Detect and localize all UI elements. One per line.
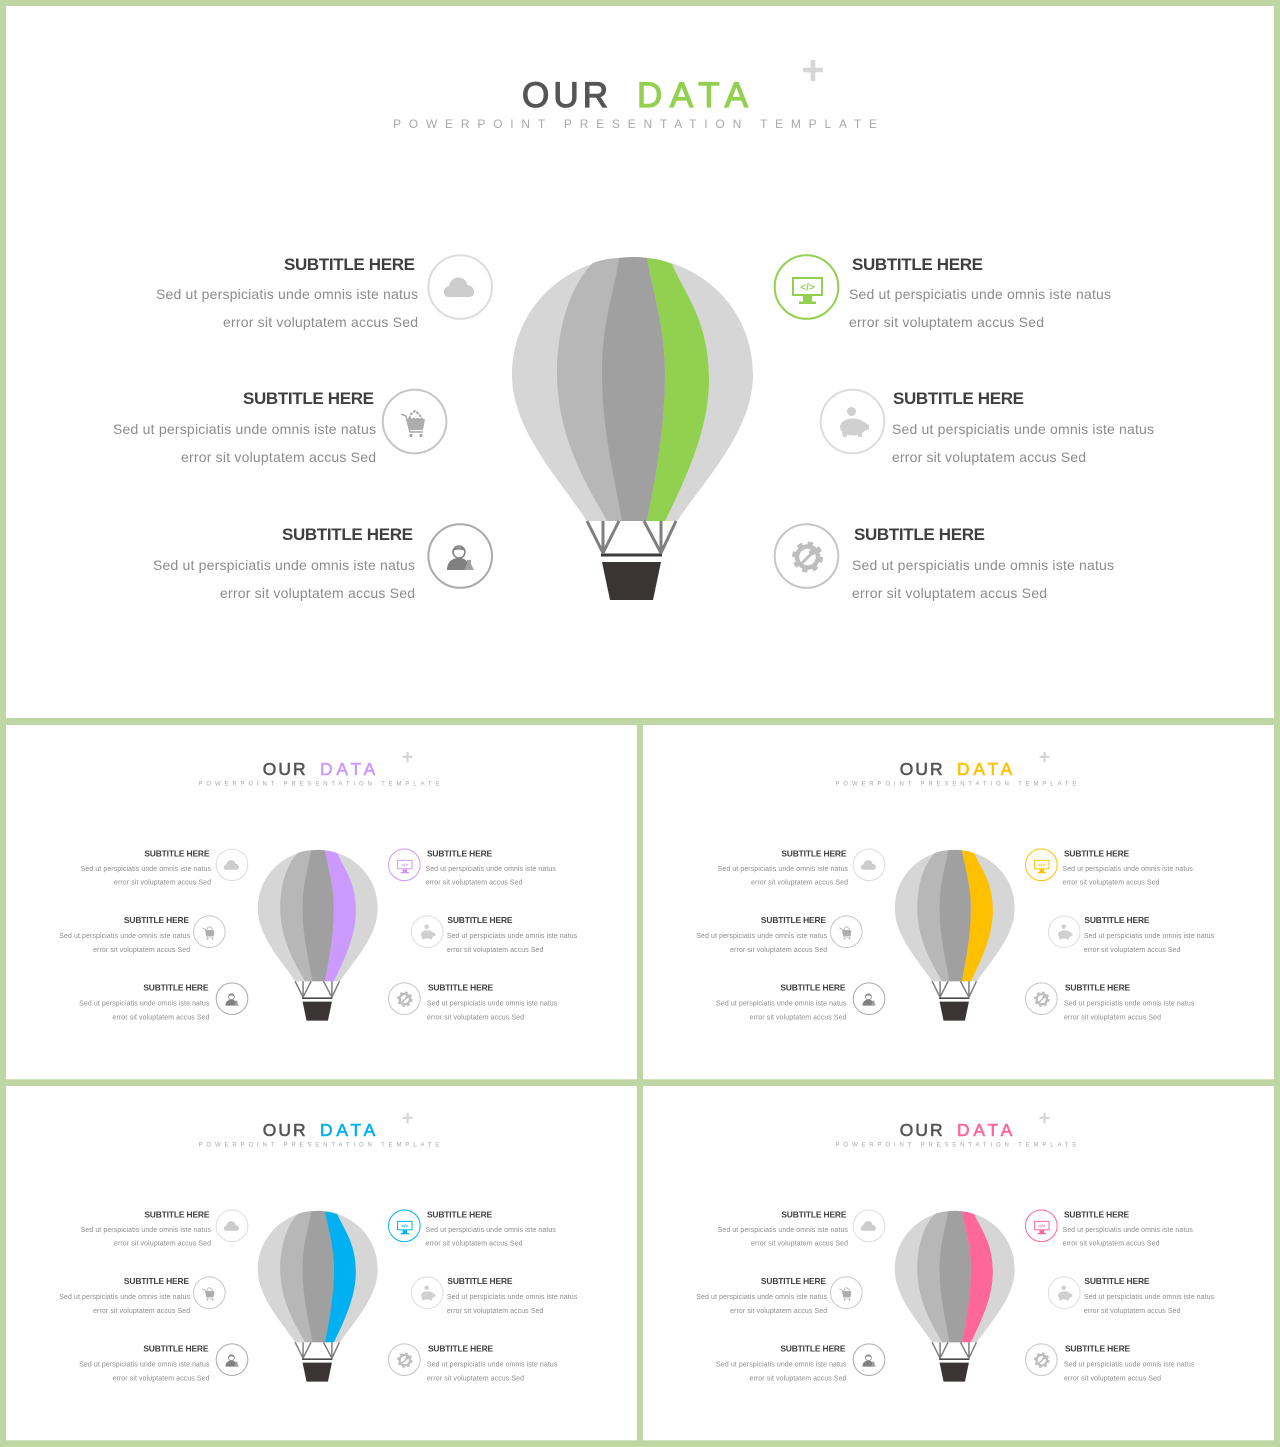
item: left middle bbox=[696, 1276, 862, 1315]
balloon bbox=[512, 257, 753, 600]
item: right top bbox=[1026, 848, 1193, 887]
item: left middle: SUBTITLE HERE bbox=[761, 1276, 826, 1286]
item: right top bbox=[389, 1209, 556, 1248]
item: left top: error sit voluptatem accus Sed bbox=[223, 314, 418, 330]
icon: plus bbox=[403, 1113, 413, 1123]
panel: slide, purple bbox=[6, 725, 637, 1079]
item: left middle: Sed ut perspiciatis unde omnis iste natus bbox=[696, 1294, 828, 1301]
item: left bottom bbox=[716, 1344, 885, 1383]
item: left bottom: SUBTITLE HERE bbox=[143, 983, 209, 993]
item: left top: SUBTITLE HERE bbox=[144, 1209, 210, 1219]
item: left top bbox=[156, 255, 492, 330]
item: right middle: error sit voluptatem accus Sed bbox=[447, 1308, 544, 1315]
item: left top bbox=[718, 848, 885, 887]
item: right bottom: SUBTITLE HERE bbox=[854, 525, 985, 544]
item: left bottom: error sit voluptatem accus Sed bbox=[220, 585, 415, 601]
item: left top: error sit voluptatem accus Sed bbox=[751, 1241, 848, 1248]
item: right top: error sit voluptatem accus Sed bbox=[425, 1241, 523, 1248]
item: right top: error sit voluptatem accus Sed bbox=[425, 880, 523, 887]
item: left bottom: SUBTITLE HERE bbox=[780, 1344, 846, 1354]
title: DATA bbox=[320, 759, 376, 779]
subtitle: POWERPOINT PRESENTATION TEMPLATE bbox=[393, 117, 877, 131]
item: left top: SUBTITLE HERE bbox=[284, 255, 415, 274]
item: right top: SUBTITLE HERE bbox=[1064, 848, 1130, 858]
icon: plus bbox=[1040, 752, 1050, 762]
item: left middle bbox=[59, 915, 225, 954]
item: left top: Sed ut perspiciatis unde omnis iste natus bbox=[81, 1227, 212, 1234]
item: left bottom: SUBTITLE HERE bbox=[143, 1344, 209, 1354]
panel: slide, yellow bbox=[643, 725, 1274, 1079]
subtitle: POWERPOINT PRESENTATION TEMPLATE bbox=[836, 782, 1076, 788]
item: left middle bbox=[113, 389, 446, 465]
subtitle: POWERPOINT PRESENTATION TEMPLATE bbox=[199, 782, 439, 788]
item: right bottom: SUBTITLE HERE bbox=[428, 1344, 494, 1354]
item: right middle bbox=[1048, 1276, 1215, 1315]
item: left middle: Sed ut perspiciatis unde omnis iste natus bbox=[59, 1294, 191, 1301]
item: right top: Sed ut perspiciatis unde omnis iste natus bbox=[849, 286, 1111, 302]
item: right bottom: error sit voluptatem accus Sed bbox=[852, 585, 1047, 601]
item: right bottom: Sed ut perspiciatis unde omnis iste natus bbox=[852, 557, 1114, 573]
item: left bottom: error sit voluptatem accus Sed bbox=[749, 1376, 847, 1383]
item: right bottom bbox=[389, 1344, 558, 1383]
item: left top bbox=[718, 1209, 885, 1248]
item: left bottom: Sed ut perspiciatis unde omnis iste natus bbox=[716, 1362, 847, 1369]
item: right middle: error sit voluptatem accus Sed bbox=[1084, 1308, 1181, 1315]
item: right top bbox=[389, 848, 556, 887]
item: left middle: SUBTITLE HERE bbox=[124, 915, 189, 925]
title: OUR bbox=[900, 759, 943, 779]
item: right middle: Sed ut perspiciatis unde omnis iste natus bbox=[1084, 933, 1215, 940]
item: right middle: SUBTITLE HERE bbox=[447, 915, 513, 925]
subtitle: POWERPOINT PRESENTATION TEMPLATE bbox=[836, 1143, 1076, 1149]
item: left middle: error sit voluptatem accus Sed bbox=[730, 1308, 827, 1315]
item: right bottom: Sed ut perspiciatis unde omnis iste natus bbox=[427, 1001, 558, 1008]
item: right bottom: Sed ut perspiciatis unde omnis iste natus bbox=[1064, 1001, 1195, 1008]
item: left bottom: Sed ut perspiciatis unde omnis iste natus bbox=[79, 1362, 210, 1369]
item: right top: SUBTITLE HERE bbox=[427, 848, 493, 858]
item: right middle: error sit voluptatem accus Sed bbox=[892, 449, 1086, 465]
panel: slide, pink bbox=[643, 1086, 1274, 1440]
title: DATA bbox=[957, 759, 1013, 779]
balloon bbox=[895, 850, 1015, 1021]
item: right top: </> bbox=[1038, 863, 1046, 869]
item: left top: Sed ut perspiciatis unde omnis iste natus bbox=[718, 1227, 849, 1234]
item: left bottom bbox=[79, 983, 248, 1022]
item: right bottom: error sit voluptatem accus Sed bbox=[427, 1376, 524, 1383]
item: left middle: SUBTITLE HERE bbox=[124, 1276, 189, 1286]
item: left bottom: error sit voluptatem accus Sed bbox=[112, 1015, 210, 1022]
title: DATA bbox=[637, 76, 749, 115]
item: right top: </> bbox=[1038, 1224, 1046, 1230]
item: left bottom bbox=[153, 524, 492, 601]
title: DATA bbox=[957, 1120, 1013, 1140]
item: left bottom: Sed ut perspiciatis unde omnis iste natus bbox=[79, 1001, 210, 1008]
item: right top: Sed ut perspiciatis unde omnis iste natus bbox=[1062, 1227, 1193, 1234]
panel: main slide, green bbox=[6, 6, 1274, 718]
item: right top: error sit voluptatem accus Sed bbox=[1062, 880, 1160, 887]
item: right top: Sed ut perspiciatis unde omnis iste natus bbox=[425, 1227, 556, 1234]
item: right top: error sit voluptatem accus Sed bbox=[849, 314, 1044, 330]
item: right middle: error sit voluptatem accus Sed bbox=[447, 947, 544, 954]
item: left top: error sit voluptatem accus Sed bbox=[114, 880, 211, 887]
title bbox=[263, 759, 376, 779]
item: left bottom: SUBTITLE HERE bbox=[780, 983, 846, 993]
item: left middle: error sit voluptatem accus Sed bbox=[93, 1308, 190, 1315]
item: right middle bbox=[1048, 915, 1215, 954]
item: right middle: Sed ut perspiciatis unde omnis iste natus bbox=[1084, 1294, 1215, 1301]
item: right top: SUBTITLE HERE bbox=[1064, 1209, 1130, 1219]
item: right bottom bbox=[1026, 1344, 1195, 1383]
item: right bottom: error sit voluptatem accus Sed bbox=[427, 1015, 524, 1022]
item: right middle: Sed ut perspiciatis unde omnis iste natus bbox=[892, 421, 1154, 437]
item: left bottom bbox=[716, 983, 885, 1022]
item: right middle bbox=[411, 1276, 578, 1315]
title: OUR bbox=[522, 76, 608, 115]
item: left top: error sit voluptatem accus Sed bbox=[114, 1241, 211, 1248]
item: left bottom: error sit voluptatem accus Sed bbox=[112, 1376, 210, 1383]
item: right top: </> bbox=[800, 282, 815, 294]
title bbox=[263, 1120, 376, 1140]
item: left bottom: SUBTITLE HERE bbox=[282, 525, 413, 544]
item: left top: Sed ut perspiciatis unde omnis iste natus bbox=[718, 866, 849, 873]
item: left middle: error sit voluptatem accus Sed bbox=[181, 449, 376, 465]
item: left bottom: Sed ut perspiciatis unde omnis iste natus bbox=[716, 1001, 847, 1008]
balloon bbox=[895, 1211, 1015, 1382]
item: left bottom bbox=[79, 1344, 248, 1383]
item: left top bbox=[81, 1209, 248, 1248]
item: left middle: SUBTITLE HERE bbox=[761, 915, 826, 925]
item: left middle: error sit voluptatem accus Sed bbox=[93, 947, 190, 954]
item: right top: error sit voluptatem accus Sed bbox=[1062, 1241, 1160, 1248]
item: right top bbox=[1026, 1209, 1193, 1248]
item: right bottom: SUBTITLE HERE bbox=[428, 983, 494, 993]
item: left middle: Sed ut perspiciatis unde omnis iste natus bbox=[59, 933, 191, 940]
title bbox=[900, 759, 1013, 779]
item: right middle bbox=[821, 389, 1154, 465]
item: right top: SUBTITLE HERE bbox=[852, 255, 983, 274]
item: right top: SUBTITLE HERE bbox=[427, 1209, 493, 1219]
title: OUR bbox=[263, 759, 306, 779]
item: left top: SUBTITLE HERE bbox=[781, 1209, 847, 1219]
title: OUR bbox=[900, 1120, 943, 1140]
item: left middle: SUBTITLE HERE bbox=[243, 389, 374, 408]
item: right top: Sed ut perspiciatis unde omnis iste natus bbox=[1062, 866, 1193, 873]
item: left middle: error sit voluptatem accus Sed bbox=[730, 947, 827, 954]
item: right middle: SUBTITLE HERE bbox=[1084, 915, 1150, 925]
item: right middle: SUBTITLE HERE bbox=[893, 389, 1024, 408]
title: OUR bbox=[263, 1120, 306, 1140]
icon: plus bbox=[403, 752, 413, 762]
item: right bottom: SUBTITLE HERE bbox=[1065, 1344, 1131, 1354]
item: right bottom: Sed ut perspiciatis unde omnis iste natus bbox=[427, 1362, 558, 1369]
item: left middle: Sed ut perspiciatis unde omnis iste natus bbox=[696, 933, 828, 940]
item: left top: Sed ut perspiciatis unde omnis iste natus bbox=[81, 866, 212, 873]
balloon bbox=[258, 850, 378, 1021]
item: left top: error sit voluptatem accus Sed bbox=[751, 880, 848, 887]
item: right middle: Sed ut perspiciatis unde omnis iste natus bbox=[447, 1294, 578, 1301]
item: right bottom bbox=[775, 524, 1114, 601]
title bbox=[522, 76, 749, 115]
panel: slide, blue bbox=[6, 1086, 637, 1440]
item: right top bbox=[775, 255, 1111, 330]
balloon bbox=[258, 1211, 378, 1382]
item: right bottom: Sed ut perspiciatis unde omnis iste natus bbox=[1064, 1362, 1195, 1369]
item: right middle: Sed ut perspiciatis unde omnis iste natus bbox=[447, 933, 578, 940]
item: left middle bbox=[696, 915, 862, 954]
item: left top: SUBTITLE HERE bbox=[781, 848, 847, 858]
item: left bottom: error sit voluptatem accus Sed bbox=[749, 1015, 847, 1022]
item: left middle bbox=[59, 1276, 225, 1315]
item: right bottom: SUBTITLE HERE bbox=[1065, 983, 1131, 993]
item: right middle bbox=[411, 915, 578, 954]
item: right bottom: error sit voluptatem accus Sed bbox=[1064, 1015, 1161, 1022]
title bbox=[900, 1120, 1013, 1140]
title: DATA bbox=[320, 1120, 376, 1140]
icon: plus bbox=[803, 60, 823, 81]
subtitle: POWERPOINT PRESENTATION TEMPLATE bbox=[199, 1143, 439, 1149]
item: right middle: error sit voluptatem accus Sed bbox=[1084, 947, 1181, 954]
item: right middle: SUBTITLE HERE bbox=[1084, 1276, 1150, 1286]
item: left bottom: Sed ut perspiciatis unde omnis iste natus bbox=[153, 557, 415, 573]
item: right top: </> bbox=[401, 863, 409, 869]
item: left top: SUBTITLE HERE bbox=[144, 848, 210, 858]
item: right middle: SUBTITLE HERE bbox=[447, 1276, 513, 1286]
item: right bottom bbox=[389, 983, 558, 1022]
item: left top bbox=[81, 848, 248, 887]
item: right top: Sed ut perspiciatis unde omnis iste natus bbox=[425, 866, 556, 873]
item: right top: </> bbox=[401, 1224, 409, 1230]
item: left top: Sed ut perspiciatis unde omnis iste natus bbox=[156, 286, 418, 302]
item: right bottom: error sit voluptatem accus Sed bbox=[1064, 1376, 1161, 1383]
item: left middle: Sed ut perspiciatis unde omnis iste natus bbox=[113, 421, 376, 437]
item: right bottom bbox=[1026, 983, 1195, 1022]
icon: plus bbox=[1040, 1113, 1050, 1123]
